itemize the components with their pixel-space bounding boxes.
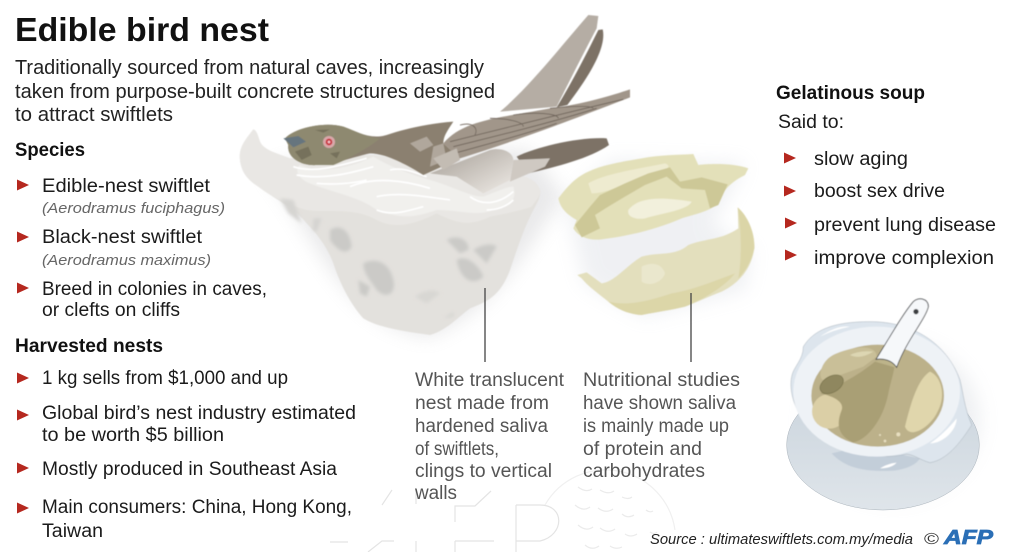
- swiftlet bird: [283, 15, 630, 193]
- spoon handle: [876, 299, 928, 367]
- submerged spoon: [820, 358, 894, 442]
- white strands: [297, 157, 514, 216]
- caption: nutrition: Nutritional studies: [583, 370, 740, 391]
- beak: [283, 136, 306, 147]
- eye: [323, 136, 335, 148]
- intro text: [15, 57, 495, 126]
- illustration: nest with swiftlet: [240, 15, 630, 337]
- bullet list: species: Breed in colonies in caves,: [42, 279, 267, 300]
- caption: nest: of swiftlets,: [415, 439, 499, 460]
- feathers light belly: [430, 149, 513, 193]
- bullet list: species: or clefts on cliffs: [42, 300, 180, 321]
- caption: nest: White translucent: [415, 370, 565, 391]
- bullet list: harvested nests: Main consumers: China, Hong Kong,: [42, 497, 352, 518]
- bullet list: species: [17, 176, 267, 321]
- source credit: Source : ultimateswiftlets.com.my/media: [650, 531, 913, 548]
- bullet list: harvested nests: Taiwan: [42, 521, 103, 542]
- subheading: said to: Said to:: [778, 112, 844, 133]
- panel: gelatinous soup: [776, 83, 996, 269]
- heading: species: Species: [15, 140, 85, 161]
- caption: nest: nest made from: [415, 393, 549, 414]
- illustration: soup bowl: [787, 299, 980, 510]
- bullet list: harvested nests: [17, 368, 356, 542]
- panel: species: [15, 140, 267, 321]
- copyright symbol: ©: [924, 531, 939, 548]
- caption: nest: clings to vertical: [415, 461, 552, 482]
- upper nest piece: [558, 154, 748, 240]
- body and head: [285, 122, 460, 175]
- bullet list: harvested nests: Global bird’s nest industry estimated: [42, 403, 356, 424]
- lower tail: [517, 138, 609, 173]
- illustration: nest pieces: [558, 154, 754, 317]
- saucer: [787, 380, 979, 510]
- caption: nest: [414, 370, 565, 504]
- caption: nutrition: carbohydrates: [583, 461, 705, 482]
- leader line: nest piece: [690, 293, 692, 362]
- AFP logo: AFP: [943, 527, 994, 549]
- intro text: taken from purpose-built concrete structures designed: [15, 81, 495, 103]
- heading: harvested nests: Harvested nests: [15, 336, 163, 357]
- nest shading patches: [280, 198, 497, 318]
- bullet list: benefits: boost sex drive: [814, 181, 945, 202]
- bowl: [791, 299, 972, 471]
- soup: [811, 345, 944, 447]
- caption: nest: hardened saliva: [415, 416, 548, 437]
- caption: nutrition: [583, 370, 740, 482]
- bullet list: species: Edible-nest swiftlet: [42, 176, 211, 197]
- bullet list: benefits: prevent lung disease: [814, 215, 996, 236]
- caption: nutrition: of protein and: [583, 439, 702, 460]
- intro text: Traditionally sourced from natural caves, increasingly: [15, 57, 484, 79]
- panel: harvested nests: [15, 336, 356, 542]
- heading: gelatinous soup: Gelatinous soup: [776, 83, 925, 104]
- bullet list: benefits: improve complexion: [814, 248, 994, 269]
- bullet list: species: (Aerodramus maximus): [42, 252, 211, 269]
- caption: nutrition: have shown saliva: [583, 393, 736, 414]
- lower nest piece: [577, 207, 754, 315]
- bullet list: harvested nests: 1 kg sells from $1,000 and up: [42, 368, 288, 389]
- upper wing: [500, 15, 598, 112]
- caption: nutrition: is mainly made up: [583, 416, 729, 437]
- nest: [240, 129, 540, 335]
- leader line: nest: [484, 288, 486, 362]
- watermark: AFP logo: [330, 470, 675, 552]
- bullet list: benefits: slow aging: [814, 149, 908, 170]
- intro text: to attract swiftlets: [15, 104, 173, 126]
- caption: nest: walls: [414, 483, 457, 504]
- bullet list: harvested nests: to be worth $5 billion: [42, 425, 224, 446]
- title: Edible bird nest: [15, 11, 269, 48]
- bullet list: species: (Aerodramus fuciphagus): [42, 200, 225, 217]
- bullet list: benefits: [784, 149, 996, 269]
- bullet list: harvested nests: Mostly produced in Southeast Asia: [42, 459, 337, 480]
- long wing: [443, 89, 630, 158]
- bullet list: species: Black-nest swiftlet: [42, 227, 203, 248]
